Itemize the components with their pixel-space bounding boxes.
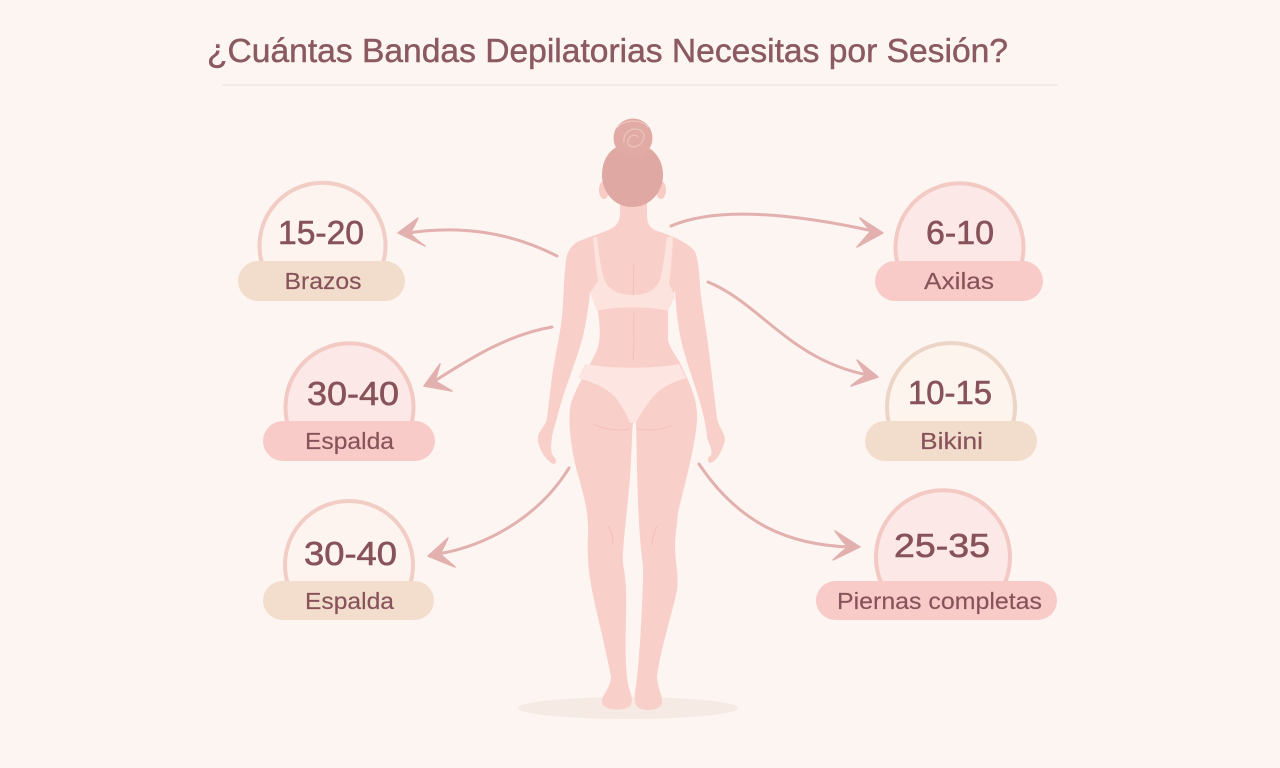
arrow to Bikini xyxy=(708,282,878,386)
bra xyxy=(590,237,675,311)
badge: Brazos: 15-20 xyxy=(278,214,364,251)
badge: Brazos: Brazos xyxy=(284,268,362,294)
hair xyxy=(602,143,663,207)
badge: Espalda lower: Espalda xyxy=(305,588,394,614)
ears xyxy=(599,181,666,199)
arrow to Espalda upper xyxy=(424,327,552,391)
badge: Piernas completas: Piernas completas xyxy=(837,588,1042,614)
badge: Bikini: 10-15 xyxy=(908,374,992,411)
badge: Bikini xyxy=(865,343,1037,461)
badge: Espalda lower xyxy=(263,501,434,620)
body contour lines xyxy=(593,265,673,545)
hair bun xyxy=(614,118,652,158)
ground shadow xyxy=(518,697,738,719)
title: ¿Cuántas Bandas Depilatorias Necesitas por Sesión? xyxy=(207,32,1008,69)
briefs xyxy=(578,364,686,423)
badge: Espalda lower: 30-40 xyxy=(304,535,397,572)
badge: Axilas: 6-10 xyxy=(926,214,994,251)
badge: Axilas: Axilas xyxy=(924,268,994,294)
arrow to Espalda lower xyxy=(428,468,569,567)
badge: Axilas xyxy=(875,183,1043,301)
badge: Bikini: Bikini xyxy=(920,428,983,454)
badge: Piernas completas xyxy=(816,490,1057,620)
badge: Brazos xyxy=(238,183,405,301)
badge: Espalda upper xyxy=(263,343,435,461)
badge: Piernas completas: 25-35 xyxy=(894,527,990,564)
body figure xyxy=(538,118,725,710)
arrow to Brazos xyxy=(398,218,557,256)
arrow to Piernas completas xyxy=(699,464,860,560)
arrow to Axilas xyxy=(671,214,883,247)
badge: Espalda upper: 30-40 xyxy=(307,375,399,412)
badge: Espalda upper: Espalda xyxy=(305,428,394,454)
silhouette xyxy=(538,200,725,710)
